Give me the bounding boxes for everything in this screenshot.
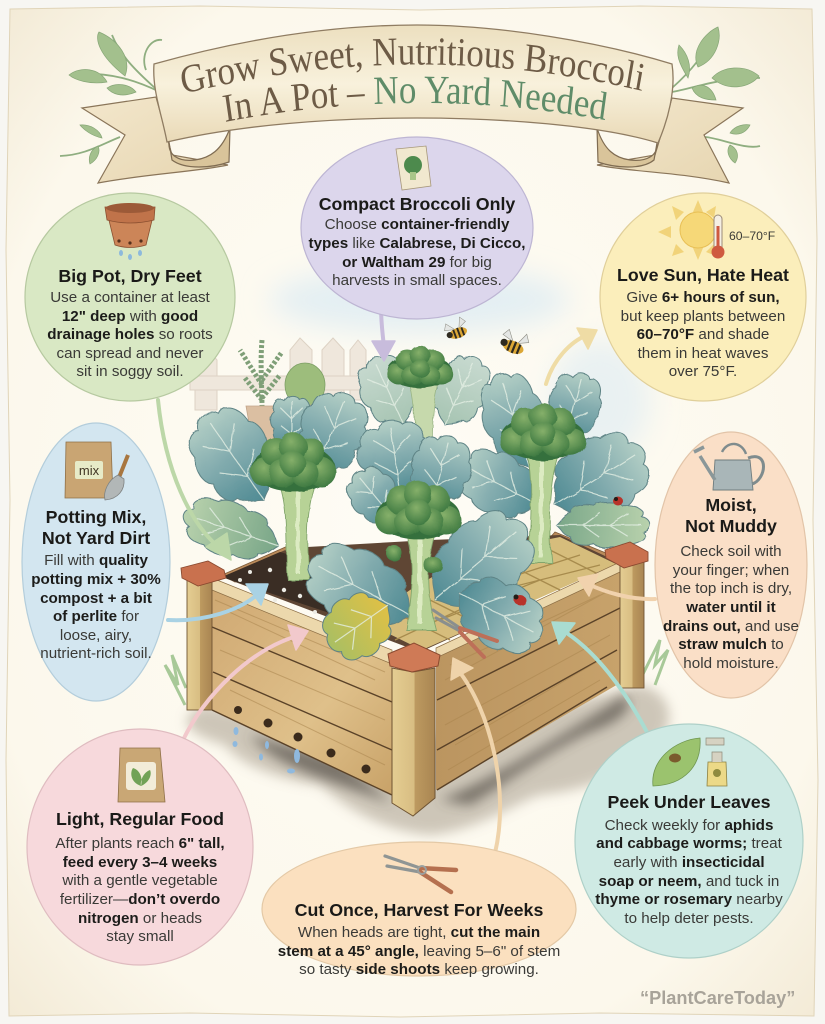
arrow: mix to soil — [168, 584, 268, 620]
title line 1 — [183, 64, 647, 94]
body text: nitrogen or heads — [78, 910, 202, 927]
title text: Grow Sweet, Nutritious Broccoli — [182, 38, 644, 92]
panel: compact broccoli — [301, 137, 533, 319]
body text: of perlite for — [53, 608, 139, 625]
body text: Check soil with — [680, 543, 782, 560]
panel: peek under leaves — [575, 724, 803, 958]
body text: Give 6+ hours of sun, — [626, 289, 780, 306]
body text — [595, 817, 783, 927]
body text: thyme or rosemary nearby — [595, 891, 783, 908]
body text — [55, 835, 225, 945]
body text: stem at a 45° angle, leaving 5–6" of stem — [278, 943, 560, 960]
icon: mix bag and trowel — [65, 442, 128, 500]
body text: or Waltham 29 for big — [342, 254, 492, 271]
panel: big pot — [25, 193, 235, 401]
icon: mix bag and trowel: mix — [79, 463, 100, 478]
perlite specks — [238, 568, 380, 627]
body text: soap or neem, and tuck in — [599, 873, 779, 890]
body text: can spread and never — [57, 345, 203, 362]
bee 1 — [442, 316, 470, 342]
body text: water until it — [685, 599, 776, 616]
heading: Peek Under Leaves — [607, 792, 771, 812]
icon: watering can — [694, 444, 764, 490]
body text — [47, 289, 213, 380]
heading: Moist, — [705, 495, 757, 515]
body text: feed every 3–4 weeks — [63, 854, 217, 871]
body text: compost + a bit — [40, 590, 152, 607]
arrows — [158, 306, 655, 853]
arrow: harvest to plant — [451, 658, 500, 853]
soil and straw surface — [222, 535, 618, 652]
grass tufts — [165, 640, 668, 705]
background scene: sky and clouds — [270, 266, 650, 460]
body text: loose, airy, — [60, 627, 132, 644]
body text: Check weekly for aphids — [605, 817, 773, 834]
body text: potting mix + 30% — [31, 571, 161, 588]
heading: Not Muddy — [685, 516, 777, 536]
illustration: raised bed with broccoli — [165, 316, 669, 835]
icon: leaf with bug and spray bottle — [653, 738, 727, 786]
arrow: variety to plant — [372, 306, 395, 361]
body text: drainage holes so roots — [47, 326, 213, 343]
panel: moist not muddy — [655, 432, 807, 698]
banner right tail — [597, 98, 743, 183]
banner main scroll — [154, 25, 673, 143]
body text: over 75°F. — [669, 363, 737, 380]
bee 2 — [498, 326, 531, 357]
body text: to help deter pests. — [624, 910, 754, 927]
yellow leaf — [311, 579, 406, 672]
body text: sit in soggy soil. — [76, 363, 184, 380]
arrow: food to bed — [183, 625, 308, 740]
water drops — [232, 727, 300, 774]
body text: Fill with quality — [44, 552, 148, 569]
heading: Compact Broccoli Only — [319, 194, 515, 214]
body text — [31, 552, 161, 662]
panel: potting mix — [22, 423, 170, 701]
heading: Potting Mix, — [46, 507, 146, 527]
banner right fold — [597, 128, 657, 167]
body text: drains out, and use — [663, 618, 799, 635]
drainage holes — [234, 706, 370, 774]
ladybug on right leaf — [613, 496, 623, 506]
front wood walls — [212, 562, 620, 795]
heading — [685, 495, 777, 536]
left plant — [173, 381, 379, 580]
panel: cut once — [262, 842, 576, 978]
banner vines left — [60, 32, 162, 164]
icon: sun and thermometer — [658, 200, 724, 260]
right plant — [446, 364, 664, 563]
body text: nutrient-rich soil. — [40, 645, 152, 662]
body text: hold moisture. — [683, 655, 779, 672]
body text: harvests in small spaces. — [332, 272, 502, 289]
body text: stay small — [106, 928, 174, 945]
body text: Choose container-friendly — [325, 216, 510, 233]
body text: types like Calabrese, Di Cicco, — [309, 235, 525, 252]
banner left tail — [82, 97, 228, 183]
banner vines right — [672, 27, 760, 163]
pale back plant — [348, 346, 500, 490]
body text: but keep plants between — [621, 308, 785, 325]
body text — [663, 543, 799, 672]
heading: Not Yard Dirt — [42, 528, 150, 548]
body text: After plants reach 6" tall, — [55, 835, 225, 852]
herb pots — [240, 340, 325, 440]
body text: When heads are tight, cut the main — [298, 924, 540, 941]
corner posts — [181, 542, 648, 816]
arrow: sun to plant — [546, 328, 597, 384]
heading: Light, Regular Food — [56, 809, 224, 829]
title line 2 — [225, 103, 605, 122]
body text: them in heat waves — [638, 345, 769, 362]
body text: Use a container at least — [50, 289, 211, 306]
body text: fertilizer—don’t overdo — [60, 891, 220, 908]
watermark credit: “PlantCareToday” — [640, 988, 795, 1008]
garden fence — [190, 338, 366, 410]
heading: Cut Once, Harvest For Weeks — [295, 900, 543, 920]
body text: and cabbage worms; treat — [596, 835, 783, 852]
ground dirt — [187, 685, 669, 835]
front teal leaf with ladybug — [442, 562, 557, 666]
center plant — [292, 415, 551, 648]
body text — [621, 289, 785, 380]
title banner — [60, 24, 760, 184]
temperature label: 60–70°F — [729, 229, 775, 243]
body text: straw mulch to — [678, 636, 784, 653]
title text: In A Pot – No Yard Needed — [222, 76, 607, 122]
plants group — [173, 346, 664, 648]
body text: so tasty side shoots keep growing. — [299, 961, 539, 978]
arrow: pot to soil — [158, 400, 231, 560]
back wall of bed — [222, 532, 618, 582]
panel: light regular food — [27, 729, 253, 965]
body text: with a gentle vegetable — [61, 872, 218, 889]
icon: seed packet — [396, 146, 431, 190]
panel: love sun — [600, 193, 806, 401]
arrow: moisture to mulch — [578, 574, 655, 599]
arrow: pests to leaf — [552, 622, 648, 734]
pruners on bed — [433, 610, 497, 657]
body text: your finger; when — [673, 562, 789, 579]
body text: 60–70°F and shade — [637, 326, 769, 343]
icon: pruning shears — [385, 856, 456, 892]
body text: 12" deep with good — [62, 308, 198, 325]
heading — [42, 507, 150, 548]
body text — [278, 924, 560, 978]
heading: Big Pot, Dry Feet — [58, 266, 202, 286]
icon: fertilizer bag — [118, 748, 165, 802]
banner left fold — [169, 128, 230, 167]
body text: the top inch is dry, — [670, 580, 792, 597]
body text — [309, 216, 525, 289]
body text: early with insecticidal — [613, 854, 765, 871]
heading: Love Sun, Hate Heat — [617, 265, 789, 285]
icon: terracotta pot with drops — [105, 203, 155, 260]
